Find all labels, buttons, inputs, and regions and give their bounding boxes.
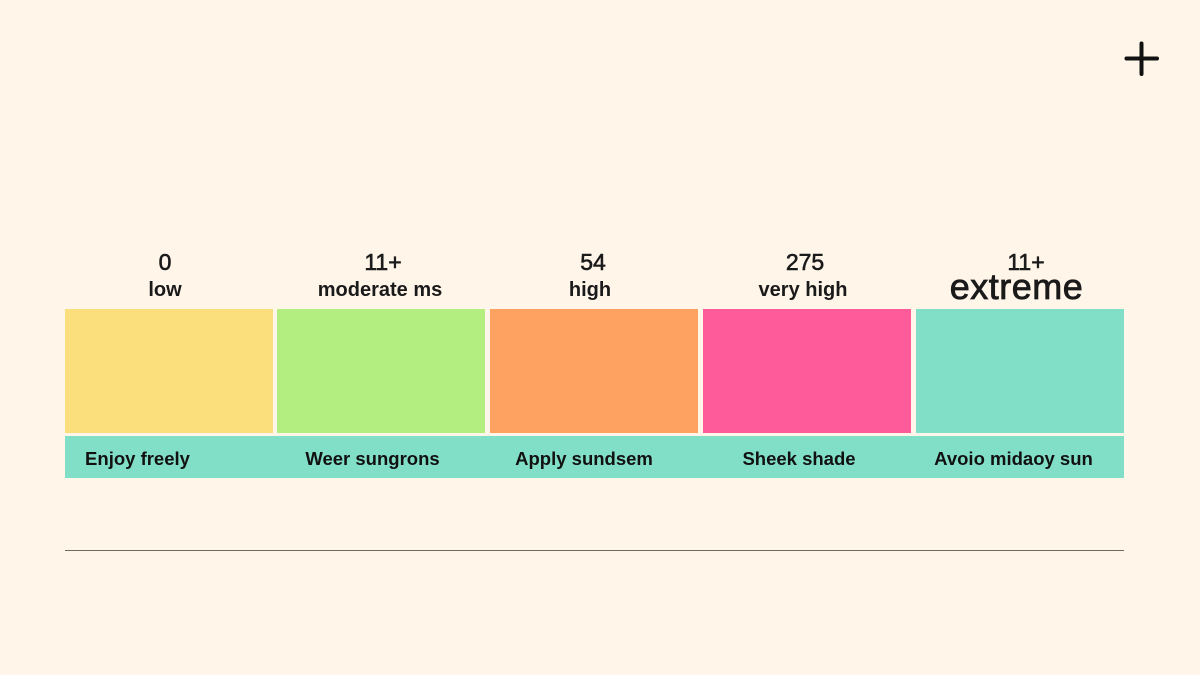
advice: sunglasses: Weer sungrons	[305, 448, 440, 469]
header: low: low	[148, 279, 182, 301]
bar: yellow	[65, 309, 273, 433]
bar: orange	[490, 309, 698, 433]
advice: shade: Sheek shade	[742, 448, 856, 469]
scale headers	[148, 249, 1083, 307]
bar: green	[277, 309, 485, 433]
header: very high: very high	[759, 279, 847, 301]
header: low: 0	[159, 249, 171, 275]
bar: teal	[916, 309, 1124, 433]
header: moderate	[318, 249, 442, 301]
header: moderate: 11+	[364, 249, 402, 275]
header: extreme: 11+	[1007, 249, 1045, 275]
header: high: high	[569, 279, 611, 301]
header: high	[569, 249, 611, 301]
advice: enjoy freely: Enjoy freely	[85, 448, 190, 469]
header: very high	[758, 249, 847, 301]
colour scale bars	[65, 309, 1124, 433]
icon: plus sign	[1124, 42, 1159, 76]
header: very high: 275	[786, 249, 824, 275]
advice: midday sun: Avoio midaoy sun	[934, 448, 1093, 469]
bar: pink	[703, 309, 911, 433]
advice strip	[65, 436, 1124, 478]
header: high: 54	[580, 249, 606, 275]
header: extreme: extreme	[950, 266, 1083, 307]
advice: sunscreen: Apply sundsem	[515, 448, 653, 469]
header: moderate: moderate ms	[318, 279, 442, 301]
header: low	[148, 249, 182, 301]
